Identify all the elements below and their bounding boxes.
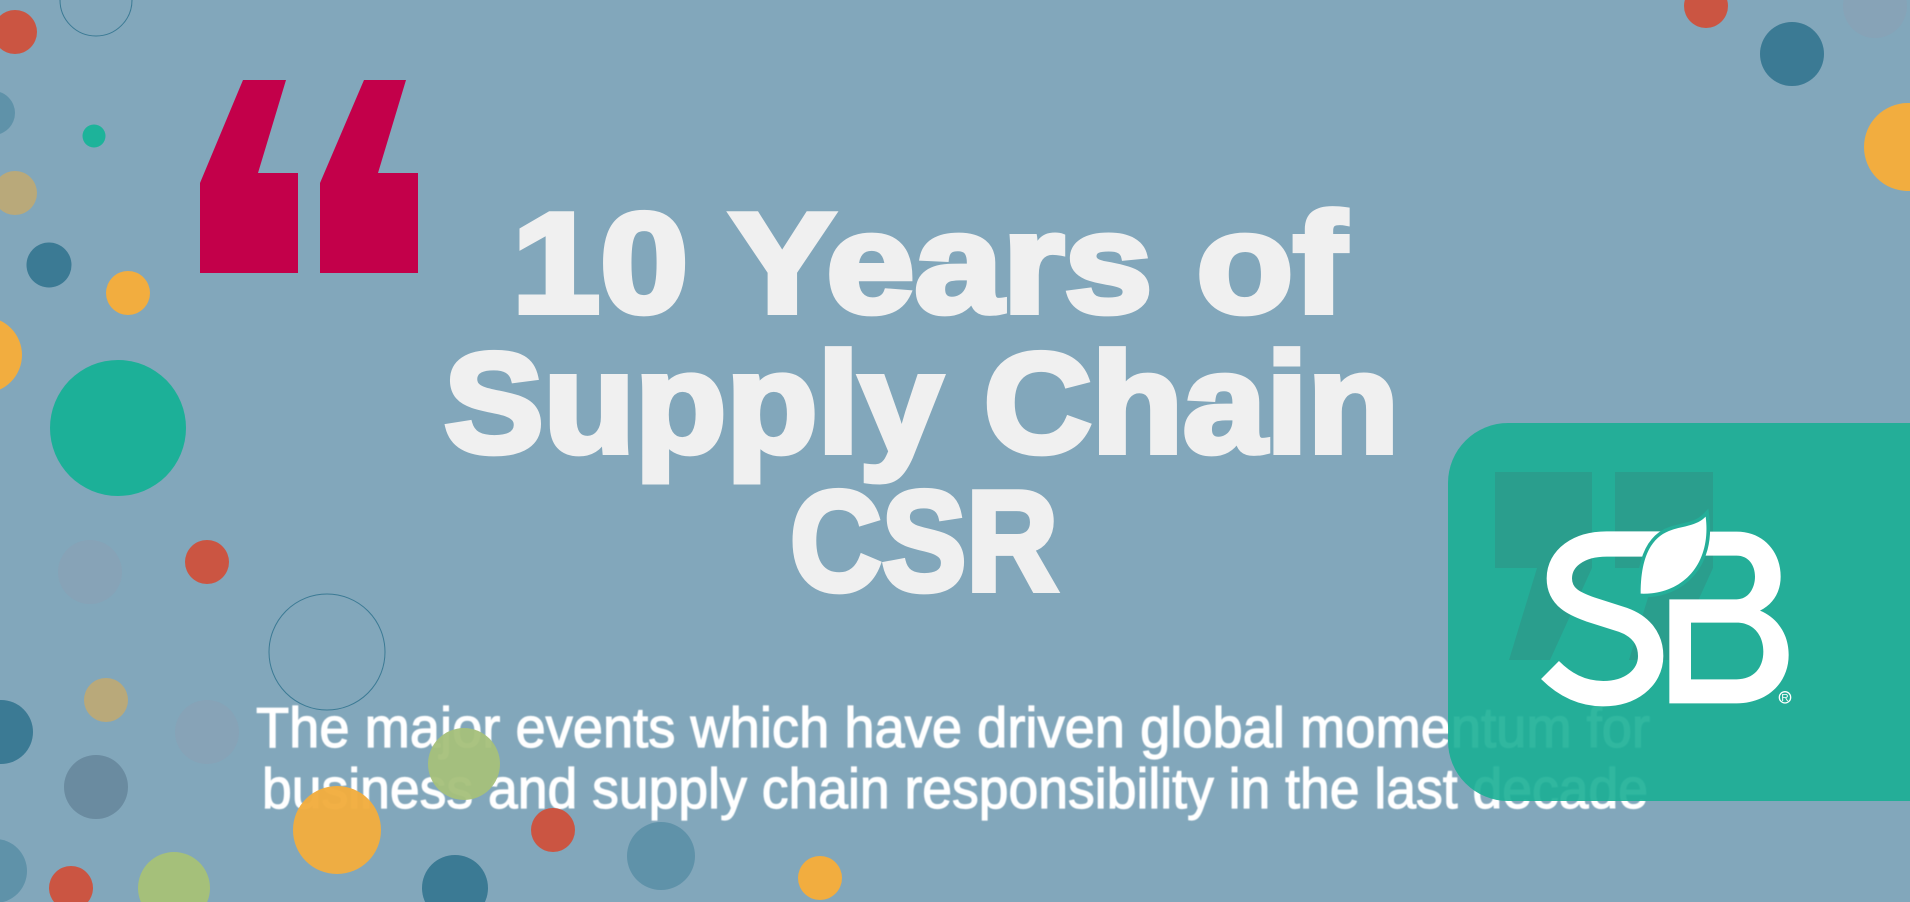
opening quotation mark: [200, 80, 418, 273]
title: 10 Years of: [512, 184, 1347, 343]
logo letter B: [1669, 532, 1789, 703]
registered mark: R: [1781, 693, 1789, 704]
subtitle: business and supply chain responsibility in the last decade: [262, 757, 1648, 821]
title: [444, 184, 1399, 621]
logo panel: [1448, 423, 1910, 801]
SB logo: [1550, 517, 1791, 704]
closing quotation mark: [1495, 472, 1713, 660]
logo letter S: [1550, 544, 1663, 694]
decorative dots: left cluster: [0, 0, 239, 902]
decorative dots: top right cluster: [1684, 0, 1910, 191]
title: CSR: [790, 462, 1058, 621]
subtitle: [256, 696, 1650, 821]
registered mark: [1779, 692, 1791, 704]
title: Supply Chain: [444, 324, 1399, 483]
logo leaf: [1641, 517, 1706, 594]
decorative dots: bottom cluster: [269, 594, 842, 902]
subtitle: The major events which have driven global momentum for: [256, 696, 1650, 760]
